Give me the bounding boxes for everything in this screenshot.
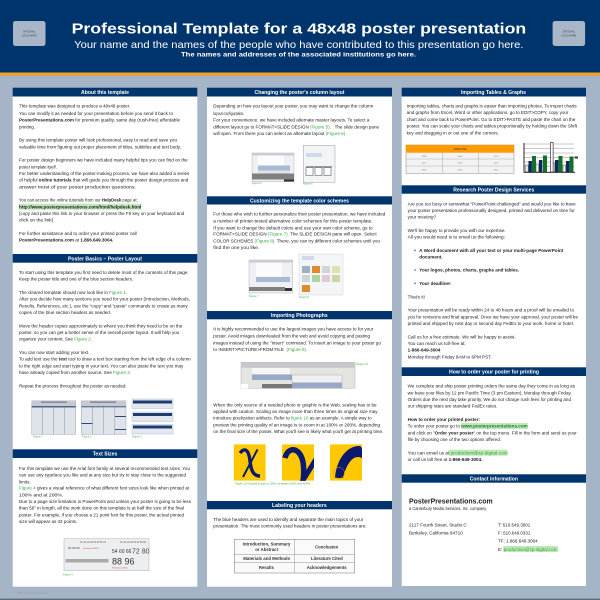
figure 4: font size samples: Printed at 200% bbox=[112, 566, 128, 570]
text block: poster basics: Results, References, etc.), use the "copy" and "paste" commands to create as many bbox=[19, 303, 189, 308]
left logo placeholder bbox=[13, 21, 46, 46]
text block: about: This template was designed to produce a 48x48 poster. bbox=[19, 104, 130, 109]
text block: about bbox=[19, 104, 190, 243]
section header: labeling: Labeling your headers bbox=[272, 503, 327, 509]
table: common headers: or Abstract bbox=[255, 547, 279, 552]
institutions line: The names and addresses of the associated institutions go here. bbox=[181, 51, 416, 58]
figure 4: font size samples: 88 96 bbox=[112, 556, 135, 566]
section header: design services: Research Poster Design Services bbox=[453, 188, 534, 194]
text block: labeling bbox=[213, 517, 367, 529]
text block: about: poster template itself. bbox=[19, 164, 57, 169]
text block: text sizes bbox=[19, 466, 192, 524]
text block: column layout bbox=[213, 104, 380, 136]
sample table bbox=[406, 145, 514, 173]
table: common headers: Conclusion bbox=[315, 544, 339, 550]
section header: Text Sizes: Text Sizes bbox=[93, 452, 117, 458]
text block: poster basics: Move the header copies approximately to where you think they need to be on the bbox=[19, 323, 183, 328]
figure 6: layout pane bbox=[303, 145, 335, 186]
text block: column layout: Depending on how you layout your poster, you may want to change the column bbox=[213, 104, 374, 109]
text block: ordering: We complete and ship poster printing orders the same day they come in as long as bbox=[408, 384, 576, 389]
section header: design services bbox=[402, 185, 586, 194]
text block: design services bbox=[408, 201, 579, 359]
text block: color schemes: COLOR SCHEMES (Figure 8). There, you can try different color schemes until you bbox=[213, 238, 381, 243]
text block: about: click on the link) bbox=[19, 218, 54, 223]
figure 4: font size samples: Printed at 100% bbox=[83, 547, 99, 550]
figure 5: format menu bbox=[252, 153, 294, 185]
text block: color schemes: find the one you like. bbox=[213, 245, 259, 250]
image: enlarged 400% bbox=[330, 444, 362, 481]
right logo placeholder: OPTIONAL bbox=[562, 30, 576, 34]
sample table: 2010 bbox=[494, 156, 499, 158]
section header: contact: Contact information bbox=[470, 476, 518, 482]
figure 1: blank layout bbox=[32, 401, 76, 438]
text block: poster basics bbox=[19, 270, 191, 388]
figure 10: letter enlarged three sizes bbox=[234, 444, 362, 485]
text block: about: For poster design beginners we have included many helpful tips you can find on the bbox=[19, 158, 188, 163]
text block: about: PosterPresentations.com at 1.866.649.3004. bbox=[19, 238, 113, 243]
text block: design services: You can reach us toll-free at: bbox=[408, 341, 466, 346]
text block: ordering: Orders due the next day take priority. We do not charge rush fees for printing and bbox=[408, 397, 572, 402]
text block: color schemes bbox=[213, 212, 386, 250]
text block: poster basics: copies of the blue section headers as needed. bbox=[19, 310, 111, 315]
text block: design services: your poster presentation professionally designed, printed and delivered on time for bbox=[408, 208, 575, 213]
figure 2: layout with headers: Figure 2 bbox=[82, 434, 92, 438]
text block: about: of helpful online tutorials that will guide you through the poster design process and bbox=[19, 178, 189, 183]
contact information: 2117 Fourth Street, Studio C bbox=[409, 523, 467, 528]
text block: about: For further assistance and to order your printed poster call bbox=[19, 231, 137, 236]
text block: tables and graphs: and graphs from Excel, Word or other applications, go to EDIT>COPY, copy your bbox=[407, 110, 569, 115]
table: common headers: Literature Cited bbox=[311, 556, 343, 561]
figure 2: layout with headers bbox=[81, 401, 126, 438]
text block: tables and graphs: Importing tables, charts and graphs is easier than importing photos. To import charts bbox=[407, 103, 578, 108]
text block: color schemes: For those who wish to further personalize their poster presentation, we have included bbox=[213, 212, 386, 217]
column 1 bbox=[13, 88, 197, 595]
text block: labeling: presentation. The most commonly used headers in poster presentations are: bbox=[213, 524, 367, 529]
left logo placeholder: LOGO HERE bbox=[22, 34, 37, 38]
text block: text sizes: 100% and at 200%. bbox=[19, 492, 63, 497]
figure 7: format menu bbox=[249, 260, 293, 298]
text block: design services: Monday through Friday 9AM to 6PM PST. bbox=[408, 354, 492, 359]
bullet list: what to send: Your logos, photos, charts, graphs and tables. bbox=[419, 268, 519, 273]
image: enlarged 200% bbox=[282, 444, 316, 482]
text block: photographs scaling: When the only source of a needed photo or graphic is the Web, scaling has to be bbox=[213, 402, 377, 407]
section header: column layout bbox=[207, 88, 392, 96]
text block: poster basics: have already copied from another source. See Figure 3. bbox=[19, 370, 131, 375]
section header: tables and graphs bbox=[402, 88, 586, 96]
text block: poster basics: Keep the poster title and one of the blue section headers. bbox=[19, 277, 133, 282]
text block: text sizes: For this template we use the Arial font family at several recommended text sizes. You bbox=[19, 466, 191, 471]
right logo placeholder bbox=[553, 21, 585, 46]
title: Professional Template for a 48x48 poster presentation bbox=[72, 20, 526, 38]
table: common headers: Results bbox=[259, 565, 275, 570]
contact information: TF: 1.866.649.3004 bbox=[498, 539, 538, 544]
text block: ordering: You can email us at production@zp-digital.com bbox=[408, 450, 508, 455]
text block: tables and graphs: poster. You can scale your charts and tables proportionally by holding down the Shift bbox=[407, 124, 578, 129]
text block: poster basics: To add text use the text tool to draw a text box starting from the left edge of a column bbox=[19, 357, 191, 362]
text block: design services: printed and shipped by next day or second day FedEx to your work, home or hotel. bbox=[408, 321, 574, 326]
text block: about: You can modify it as needed for your presentation before you send it back to bbox=[19, 111, 174, 116]
text block: ordering: file by choosing one of the two options offered. bbox=[408, 437, 501, 442]
text block: photographs scaling bbox=[213, 402, 383, 434]
section header: ordering: How to order your poster for printing bbox=[449, 370, 539, 376]
contact information bbox=[409, 497, 558, 552]
bullet list: what to send: document. bbox=[419, 255, 443, 260]
bullet list: what to send bbox=[414, 248, 564, 286]
figure 4: font size samples: Figure 4 bbox=[63, 572, 73, 576]
text block: design services: Call us for a free estimate. We will be happy to assist. bbox=[408, 334, 516, 339]
section header: About this template: About this template bbox=[81, 90, 129, 96]
column 2 bbox=[207, 88, 392, 587]
text block: about: You can access the online tutorials from our HelpDesk page at: bbox=[19, 198, 138, 203]
text block: poster basics: organize your content. See Figure 2. bbox=[19, 337, 92, 342]
text block: photographs intro bbox=[213, 326, 382, 352]
text block: text sizes: can use any typeface you like and at any size but try to stay close to the suggested bbox=[19, 472, 187, 477]
text block: column layout: different layout go to FORMAT>SLIDE DESIGN (Figure 5). The slide design pane bbox=[213, 124, 380, 129]
figure 9: insert picture menu bbox=[241, 362, 368, 388]
text block: design services: you for revisions and final approval. Once we have your approval, your poster will be bbox=[408, 314, 579, 319]
text block: about: For better understanding of the poster-making process, we have also added a series bbox=[19, 171, 190, 176]
text block: photographs intro: It is highly recommended to use the largest images you have access to for your bbox=[213, 326, 374, 331]
figure 6: layout pane: Figure 6 bbox=[303, 182, 313, 186]
section header: Poster Basics bbox=[13, 254, 197, 263]
text block: about: http://www.posterpresentations.com/html/helpdesk.html bbox=[19, 204, 141, 209]
text block: poster basics: You can now start adding your text. bbox=[19, 350, 89, 355]
text block: about: PosterPresentations.com for premium quality, same day (rush-free) affordable bbox=[19, 118, 181, 123]
figure 5: format menu: Figure 5 bbox=[252, 181, 262, 185]
text block: color schemes: If you want to change the default colors and use your own color scheme, go to bbox=[213, 225, 373, 230]
text block: labeling: The blue headers are used to identify and separate the main topics of your bbox=[213, 517, 364, 522]
contact information: T: 510.649.3001 bbox=[498, 523, 531, 528]
text block: design services: Your presentation will be ready within 24 to 48 hours and a proof will be emailed to bbox=[408, 308, 575, 313]
sample table: TABLE ONE bbox=[453, 148, 467, 151]
text block: ordering: How to order your printed poster: bbox=[408, 417, 481, 422]
text block: text sizes: than 56" in length, all the work done on this template is at half the size of the final bbox=[19, 506, 184, 511]
section header: ordering bbox=[402, 367, 586, 376]
text block: ordering: our shipping rates are standard FedEx rates. bbox=[408, 404, 497, 409]
figure 10: letter enlarged three sizes: Figure 10 Original image at 100%, enlarged 200% and 400% bbox=[235, 481, 311, 485]
footer note: ©2008 PosterPresentations bbox=[15, 591, 47, 595]
section header: column layout: Changing the poster's column layout bbox=[254, 90, 345, 96]
sample table: 2018 bbox=[458, 162, 463, 164]
table: common headers: Introduction, Summary bbox=[243, 542, 291, 546]
section header: photographs bbox=[207, 311, 392, 319]
figure 4: font size samples: 60 66 96 bbox=[68, 546, 80, 550]
text block: column layout: will open. From there you can select an alternate layout (Figure 6). bbox=[213, 131, 347, 136]
text block: design services: 1-866-649-3004 bbox=[408, 348, 441, 353]
text block: text sizes: poster. For example, if you choose a 21 point font for this poster, the actual printed bbox=[19, 512, 185, 517]
sample table: 2017 bbox=[422, 162, 427, 164]
figure 4: font size samples bbox=[63, 539, 150, 576]
text block: color schemes: FORMAT>SLIDE DESIGN (Figure 7). The SLIDE DESIGN pane will open. Select bbox=[213, 232, 377, 237]
section header: About this template bbox=[13, 88, 197, 96]
text block: poster basics: After you decide how many sections you need for your poster (Introduction, Methods, bbox=[19, 297, 190, 302]
sample table: 2019 bbox=[422, 169, 427, 171]
column 3 bbox=[402, 88, 586, 586]
contact information: E: production@zp-digital.com bbox=[498, 547, 558, 552]
text block: photographs scaling: on the final size of the poster. What you'll see is likely what you'll get at printing time. bbox=[213, 429, 383, 434]
text block: design services: That's it! bbox=[408, 294, 425, 299]
text block: ordering: or call us toll free at 1-866-649-3004. bbox=[408, 457, 482, 462]
contact information: F: 510.649.0331 bbox=[498, 531, 531, 536]
text block: about: (copy and paste this link to your browser or press the F5 key on your keyboard and bbox=[19, 211, 185, 216]
figure 3: header bars bbox=[132, 399, 173, 438]
text block: tables and graphs: key and dragging in or out one of the corners. bbox=[407, 130, 499, 135]
figure 4: font size samples: 54 60 66 bbox=[112, 549, 132, 555]
text block: poster basics: The cleared template should now look like in Figure 1. bbox=[19, 290, 127, 295]
figure 1: blank layout: Figure 1 bbox=[33, 434, 43, 438]
text block: photographs scaling: preview the printing quality of an image is to zoom in at 100% or 200%, depending bbox=[213, 422, 381, 427]
poster header banner bbox=[0, 0, 600, 76]
sample table: 2020 bbox=[458, 169, 463, 171]
text block: design services: We'll be happy to provide you with our expertise. bbox=[408, 228, 506, 233]
contact information: PosterPresentations.com bbox=[409, 497, 493, 506]
text block: design services: your meeting? bbox=[408, 215, 437, 220]
section header: color schemes: Customizing the template color schemes bbox=[250, 198, 349, 204]
text block: photographs intro: images instead of using the "insert" command. To insert an image to your poster go bbox=[213, 340, 382, 345]
section header: photographs: Importing Photographs bbox=[271, 313, 328, 319]
text block: about: valuable time from figuring out proper placement of titles, subtitles and text body. bbox=[19, 144, 181, 149]
section header: tables and graphs: Importing Tables & Graphs bbox=[461, 90, 526, 96]
section header: color schemes bbox=[207, 196, 392, 204]
authors line: Your name and the names of the people who have contributed to this presentation go here. bbox=[74, 39, 523, 51]
text block: poster basics: To start using this template you first need to delete most of the contents of this page. bbox=[19, 270, 189, 275]
text block: ordering: and click on "Order your poster " on the top menu. Fill in the form and send us your bbox=[408, 430, 577, 435]
text block: design services: All you would need is to email us the following: bbox=[408, 235, 505, 240]
section header: contact bbox=[402, 474, 586, 483]
sample table: 2019 bbox=[494, 162, 499, 164]
figure 7: format menu: Figure 7 bbox=[249, 294, 259, 298]
text block: color schemes: a number of printer-tested alternative color schemes for this poster template. bbox=[213, 219, 373, 224]
bullet list: what to send: A Word document with all your text or your multi-page PowerPoint bbox=[419, 248, 564, 253]
contact information: Berkeley, California 94710 bbox=[409, 531, 463, 536]
sample table: 2000 bbox=[458, 156, 463, 158]
figure 4: font size samples: 10 12 14 18 24 32 54 72 bbox=[80, 541, 107, 544]
left logo placeholder: OPTIONAL bbox=[23, 30, 36, 34]
text block: photographs scaling: introduce pixelization artifacts. Refer to figure 10 as an example. A simple way to bbox=[213, 416, 372, 421]
text block: tables and graphs: chart and come back to PowerPoint. Go to EDIT>PASTE and paste the chart on the bbox=[407, 117, 576, 122]
sample table: 2021 bbox=[494, 169, 499, 171]
table: common headers: Acknowledgements bbox=[307, 565, 347, 570]
figure 9: insert picture menu: (Figure 9) bbox=[356, 362, 368, 366]
text block: text sizes: limits. bbox=[19, 479, 31, 484]
text block: column layout: layout configuration. bbox=[213, 111, 244, 116]
figure 3: header bars: Figure 3 bbox=[132, 434, 142, 438]
figure 8: color scheme swatches: Figure 8 bbox=[299, 295, 309, 299]
text block: about: By using this template poster will look professional, easy to read and save you bbox=[19, 138, 178, 143]
section header: Text Sizes bbox=[13, 449, 197, 458]
image: original letter bbox=[234, 444, 266, 481]
text block: photographs intro: poster. Avoid images downloaded from the web and avoid copying and pasting bbox=[213, 333, 371, 338]
text block: ordering: we have your files by 12 pm Pacific Time (3 pm Eastern), Monday through Friday. bbox=[408, 390, 572, 395]
bar chart bbox=[524, 142, 578, 172]
figure 8: color scheme swatches bbox=[299, 254, 343, 299]
bullet list: what to send: Your deadline! bbox=[419, 281, 451, 286]
text block: text sizes: Figure 4 gives a visual reference of what different font sizes look like when printed at bbox=[19, 486, 190, 491]
text block: design services: Are you too busy or somewhat "PowerPoint-challenged" and would you like to have bbox=[408, 201, 576, 206]
table: common headers bbox=[234, 539, 355, 573]
sample table: 1998 bbox=[422, 156, 427, 158]
text block: text sizes: Due to a page size limitation in PowerPoint and unless your poster is going to be less bbox=[19, 499, 192, 504]
text block: ordering bbox=[408, 384, 577, 462]
text block: photographs intro: to INSERT>PICTURE>FROM FILE (Figure 9). bbox=[213, 347, 307, 352]
contact information: a Canterbury Media Services, Inc. company bbox=[409, 506, 487, 511]
text block: poster basics: poster, so you can get a better sense of the overall poster layout. It will help you bbox=[19, 330, 180, 335]
text block: about: printing. bbox=[19, 124, 35, 129]
figure 4: font size samples: 72 80 bbox=[132, 548, 150, 556]
section header: labeling bbox=[207, 501, 392, 509]
text block: ordering: To order your poster go to www.posterpresentations.com bbox=[408, 424, 528, 429]
table: common headers: Materials and Methods bbox=[243, 556, 291, 561]
section header: Poster Basics: Poster Basics – Poster Layout bbox=[68, 256, 142, 262]
figure 4: font size samples: 10 12 14 18 24 32 54 60 bbox=[120, 541, 147, 544]
right logo placeholder: LOGO HERE bbox=[561, 34, 577, 38]
text block: tables and graphs bbox=[407, 103, 578, 135]
text block: text sizes: size will appear as 42 points. bbox=[19, 519, 77, 524]
text block: poster basics: to the right edge and start typing in your text. You can also paste the text you may bbox=[19, 363, 184, 368]
text block: about: answer most of your poster production questions. bbox=[19, 184, 136, 189]
text block: poster basics: Repeat the process throughout the poster as needed. bbox=[19, 383, 127, 388]
text block: column layout: For your convenience, we have included alternate master layouts. To select a bbox=[213, 118, 370, 123]
text block: photographs scaling: applied with caution. Scaling an image more than three times its original size may bbox=[213, 409, 378, 414]
